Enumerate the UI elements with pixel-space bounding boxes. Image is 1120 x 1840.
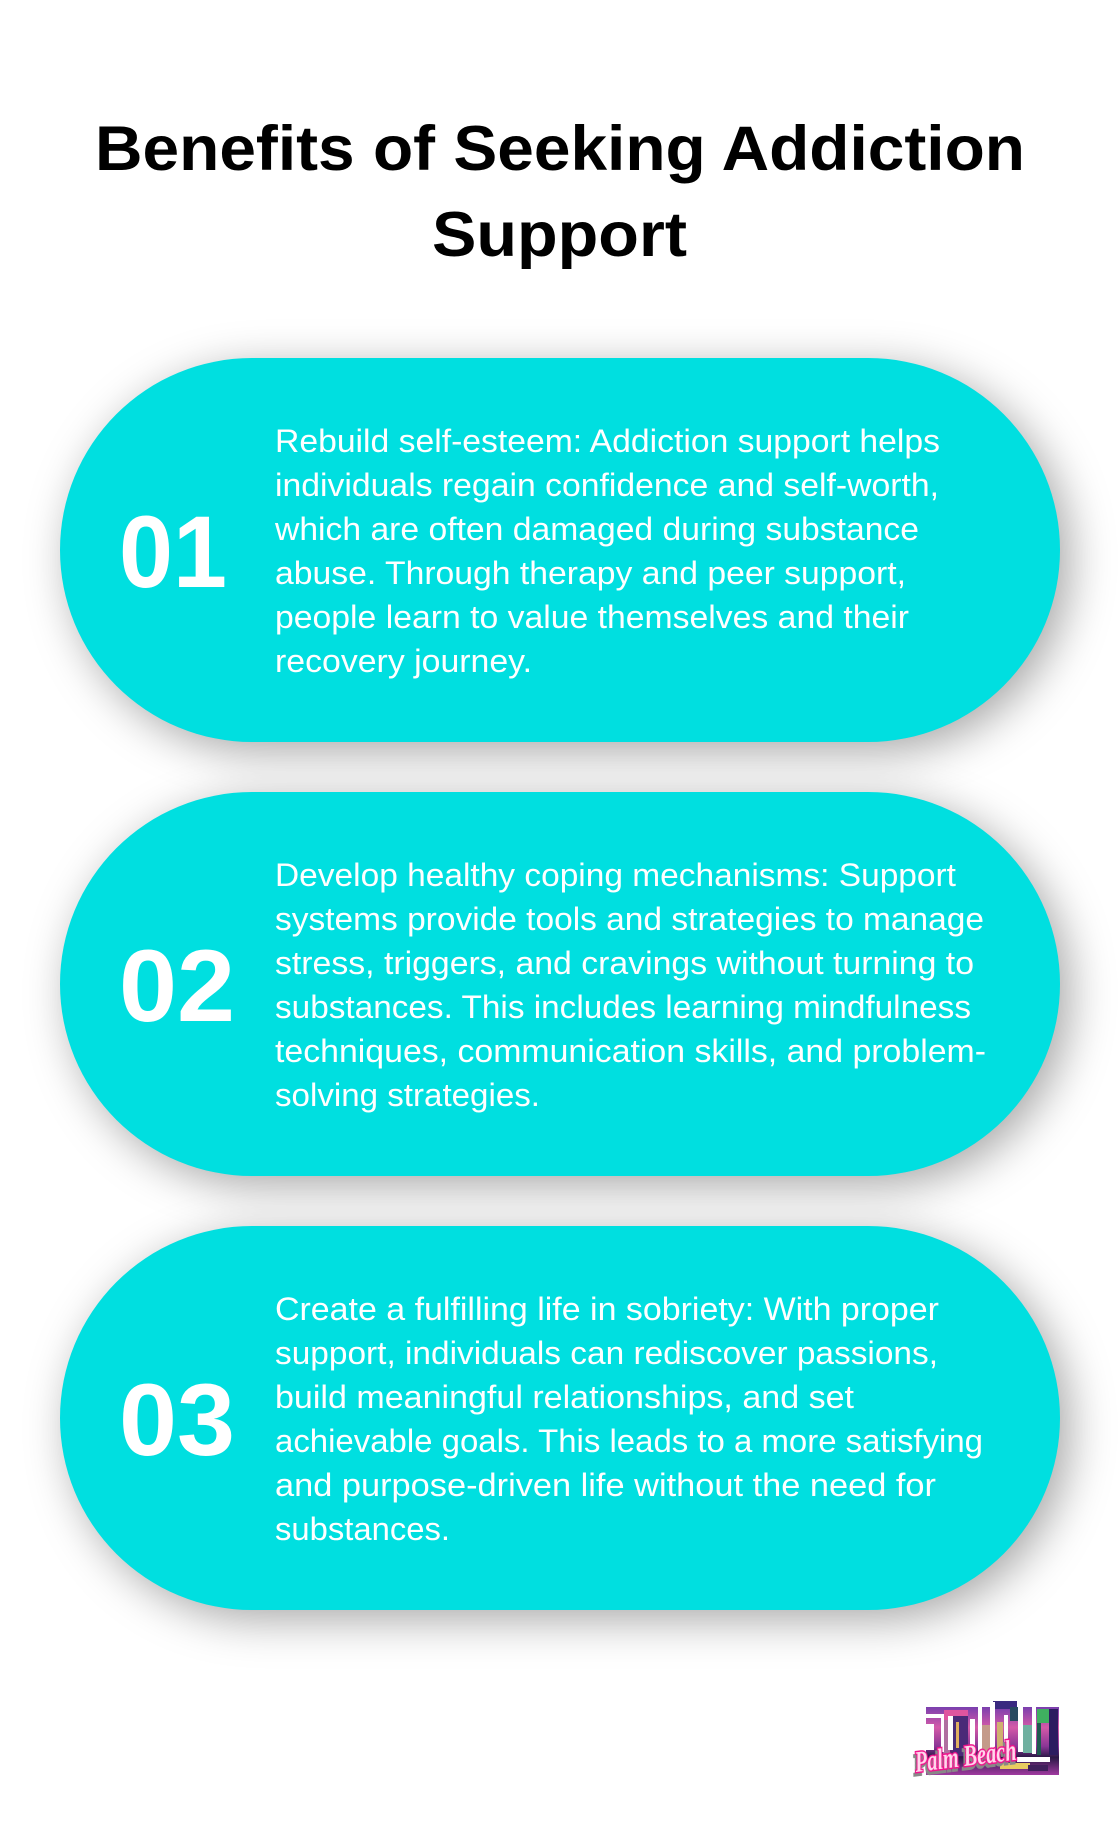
text: healthy coping mechanisms — [275, 857, 986, 1113]
text: rebuild self-esteem: recovery journey. — [275, 643, 532, 679]
text: healthy coping mechanisms: stress, triggers, and cravings without turning to — [275, 945, 974, 981]
text: rebuild self-esteem: individuals regain confidence and self-worth, — [275, 467, 939, 503]
text: fulfilling life in sobriety: support, individuals can rediscover passions, — [275, 1335, 938, 1371]
number 03: 03 — [119, 1363, 235, 1477]
text: rebuild self-esteem: people learn to value themselves and their — [275, 599, 909, 635]
title — [95, 114, 1025, 270]
panel: benefit 03 — [60, 1226, 1060, 1610]
text: fulfilling life in sobriety: build meaningful relationships, and set — [275, 1379, 854, 1415]
text: healthy coping mechanisms: systems provide tools and strategies to manage — [275, 901, 984, 937]
logo: Amity Palm Beach — [912, 1701, 1059, 1779]
panel: benefit 02 — [60, 792, 1060, 1176]
text: rebuild self-esteem: which are often damaged during substance — [274, 511, 919, 547]
title: Benefits of Seeking Addiction — [95, 114, 1025, 184]
title: Support — [432, 200, 687, 270]
text: fulfilling life in sobriety: achievable goals. This leads to a more satisfying — [275, 1423, 983, 1459]
logo script: Palm Beach: Palm Beach — [912, 1734, 1018, 1779]
text: healthy coping mechanisms: techniques, communication skills, and problem- — [275, 1033, 986, 1069]
text: fulfilling life in sobriety: Create a fulfilling life in sobriety: With proper — [275, 1291, 939, 1327]
text: healthy coping mechanisms: substances. This includes learning mindfulness — [275, 989, 971, 1025]
panel: benefit 01 — [60, 358, 1060, 742]
text: fulfilling life in sobriety: substances. — [275, 1511, 450, 1547]
text: fulfilling life in sobriety — [275, 1291, 983, 1547]
text: healthy coping mechanisms: Develop healthy coping mechanisms: Support — [275, 857, 956, 893]
text: rebuild self-esteem — [274, 423, 940, 679]
text: healthy coping mechanisms: solving strategies. — [275, 1077, 540, 1113]
text: fulfilling life in sobriety: and purpose-driven life without the need for — [275, 1467, 936, 1503]
text: rebuild self-esteem: Rebuild self-esteem: Addiction support helps — [275, 423, 940, 459]
number 01: 01 — [119, 495, 227, 609]
number 02: 02 — [119, 929, 235, 1043]
white letter cut-outs — [926, 1702, 1050, 1762]
text: rebuild self-esteem: abuse. Through therapy and peer support, — [275, 555, 906, 591]
